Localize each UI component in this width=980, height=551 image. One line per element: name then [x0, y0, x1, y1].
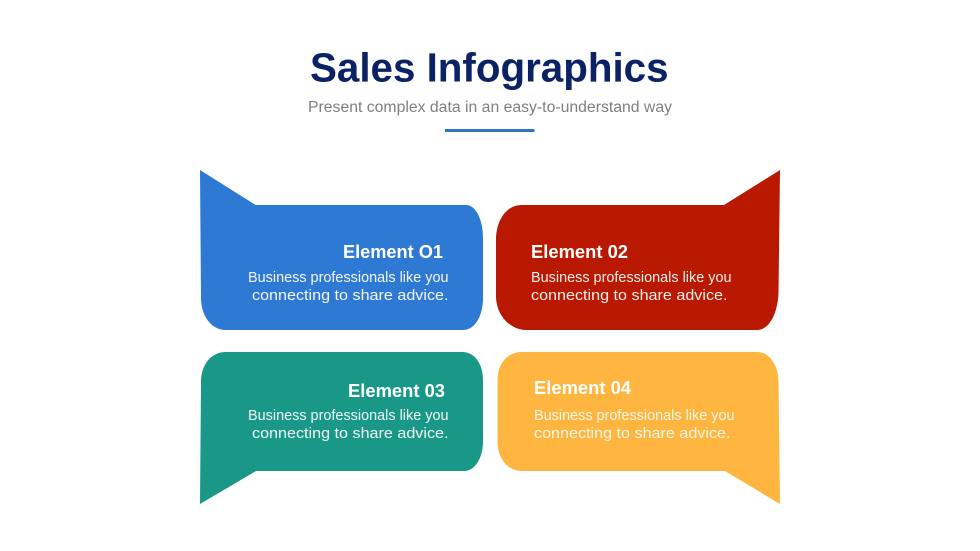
title underline	[445, 129, 534, 132]
body text: element 02: Business professionals like you	[531, 270, 732, 286]
body text: element 03	[248, 408, 448, 442]
heading: element 04: Element 04	[534, 377, 632, 398]
panel: element 03	[200, 352, 483, 504]
body text: element 01: Business professionals like you	[248, 270, 448, 286]
panel: element 04	[498, 352, 780, 504]
panel: element 02	[496, 170, 780, 330]
panel: element 01	[200, 170, 483, 330]
subtitle: Present complex data in an easy-to-understand way	[308, 99, 672, 116]
body text: element 04	[534, 408, 734, 442]
heading: element 02: Element 02	[531, 241, 628, 262]
speech bubble: blue	[200, 170, 483, 330]
body text: element 03: connecting to share advice.	[252, 426, 448, 442]
heading: element 03: Element 03	[348, 380, 445, 401]
header	[308, 44, 672, 132]
body text: element 04: Business professionals like you	[534, 408, 734, 424]
body text: element 04: connecting to share advice.	[534, 426, 730, 442]
body text: element 02	[531, 270, 732, 304]
heading: element 01: Element O1	[343, 241, 443, 262]
speech bubble: teal	[200, 352, 483, 504]
title: Sales Infographics	[310, 44, 668, 90]
body text: element 01: connecting to share advice.	[252, 288, 448, 304]
body text: element 03: Business professionals like you	[248, 408, 448, 424]
speech bubble: red	[496, 170, 780, 330]
body text: element 02: connecting to share advice.	[531, 288, 728, 304]
speech bubble: yellow	[498, 352, 780, 504]
body text: element 01	[248, 270, 448, 304]
